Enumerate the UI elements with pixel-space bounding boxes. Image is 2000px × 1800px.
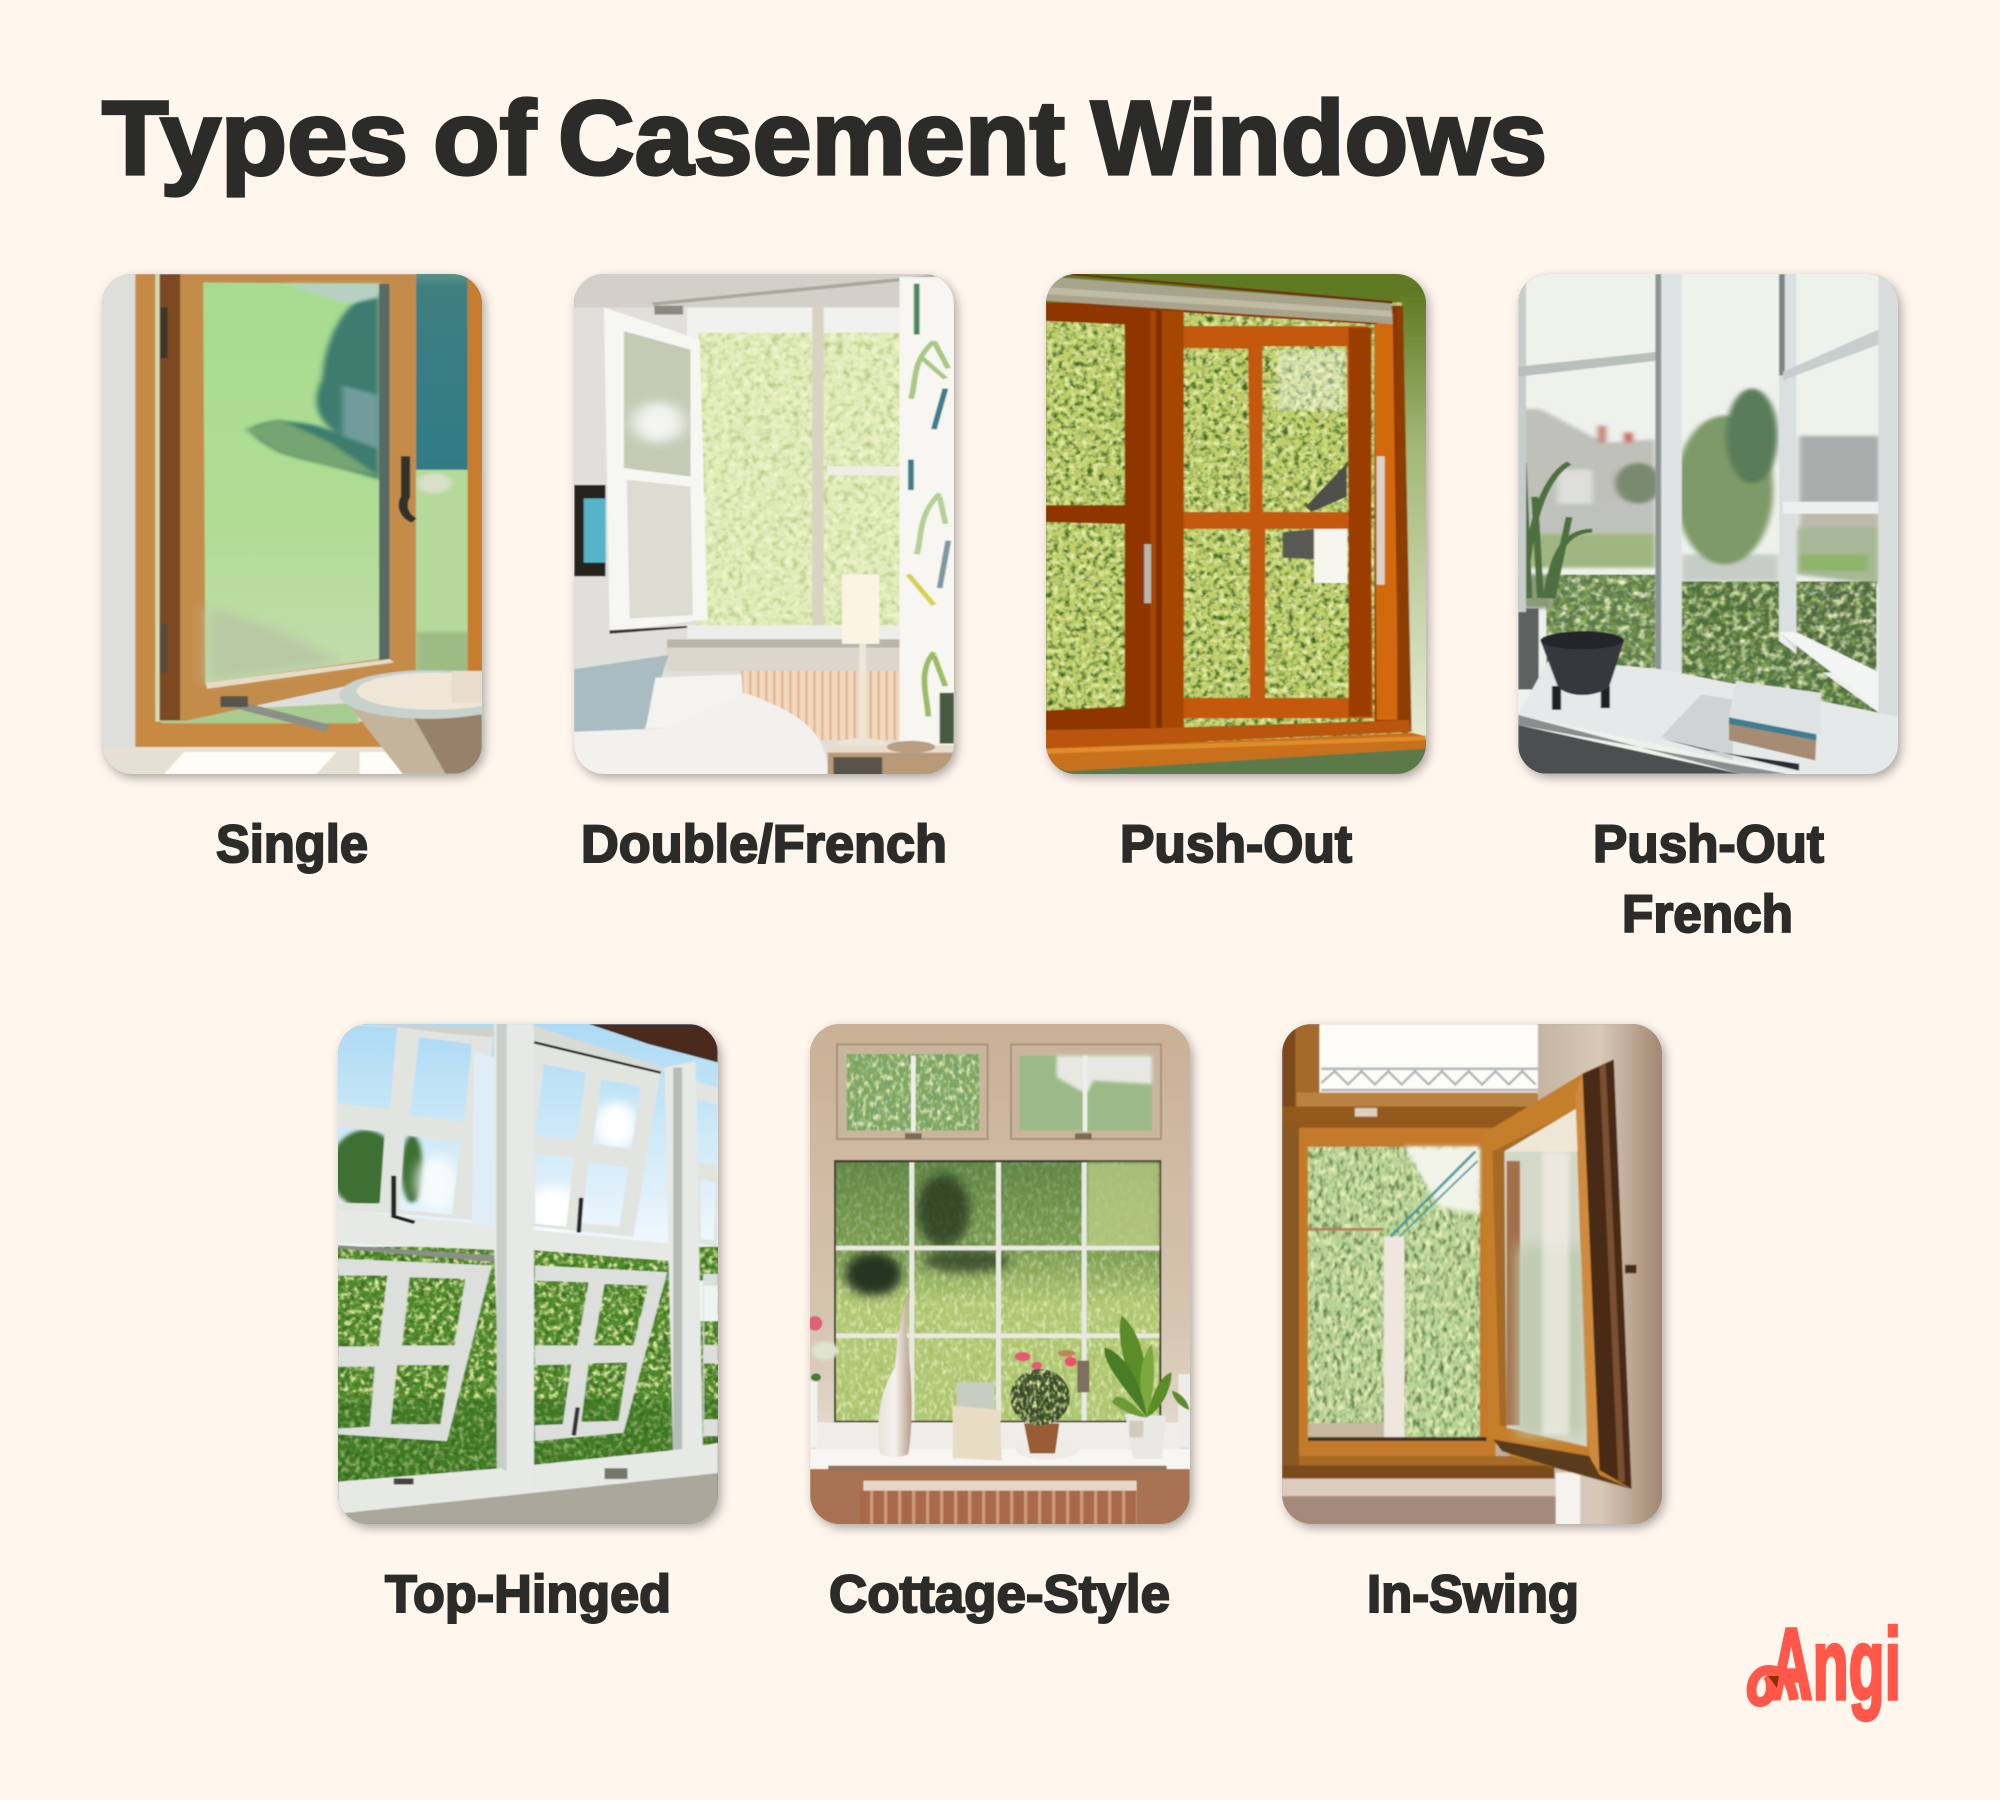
logo: Angi: Angi (1770, 1609, 1901, 1721)
panel: push-out French casement window (1515, 272, 1907, 934)
logo: Angi (1752, 1609, 1901, 1721)
label: push-out french: Push-Out (1593, 815, 1824, 874)
photo: single (99, 272, 491, 784)
upper sash middle (534, 1044, 661, 1237)
lower sash middle (535, 1265, 667, 1441)
label: double french: Double/French (581, 815, 947, 874)
upper right strip (696, 1081, 718, 1247)
label: top-hinged: Top-Hinged (385, 1565, 671, 1624)
photo: in-swing (1270, 1010, 1672, 1529)
bottom sill (338, 1443, 718, 1514)
photo: cottage-style (800, 1014, 1200, 1534)
wall and radiator (810, 1469, 1190, 1526)
label: push-out french (1593, 815, 1824, 944)
vase (878, 1290, 912, 1457)
flower pot (1016, 1450, 1078, 1459)
green plant (1125, 1414, 1166, 1459)
mullions (494, 1024, 534, 1490)
panel: double / French casement window (571, 272, 963, 864)
photo: top-hinged (330, 1010, 728, 1524)
label: cottage-style: Cottage-Style (829, 1565, 1170, 1624)
title (102, 80, 1547, 197)
photo: push-out (1043, 272, 1435, 784)
hardware (394, 1176, 415, 1222)
open sash (1483, 1059, 1632, 1489)
label: in-swing: In-Swing (1367, 1565, 1579, 1624)
panel: in-swing casement window (1270, 1010, 1672, 1624)
card (957, 1382, 994, 1409)
upper sash left (338, 1024, 494, 1220)
label: push-out: Push-Out (1120, 815, 1352, 874)
title: of (433, 80, 537, 197)
main pane foliage (834, 1160, 1161, 1424)
panel: cottage-style casement window (800, 1014, 1200, 1624)
panel: top-hinged casement window (330, 1010, 728, 1624)
panel: single casement window (99, 272, 491, 874)
left flower (808, 1316, 822, 1331)
title: Windows (1091, 80, 1547, 197)
label: single: Single (216, 815, 368, 874)
photo: push-out french (1515, 272, 1907, 784)
lower frame and jambs (817, 1422, 1180, 1449)
lower sash left (338, 1259, 492, 1441)
photo: double french (571, 272, 963, 784)
label: push-out french: French (1622, 885, 1793, 944)
panel: push-out casement window (1030, 260, 1443, 874)
top rail and roof (372, 1024, 494, 1037)
title: Types (102, 80, 408, 197)
title: Casement (558, 80, 1065, 197)
muntins (836, 1162, 1159, 1421)
sill (810, 1449, 1190, 1469)
transom panes (836, 1043, 989, 1140)
